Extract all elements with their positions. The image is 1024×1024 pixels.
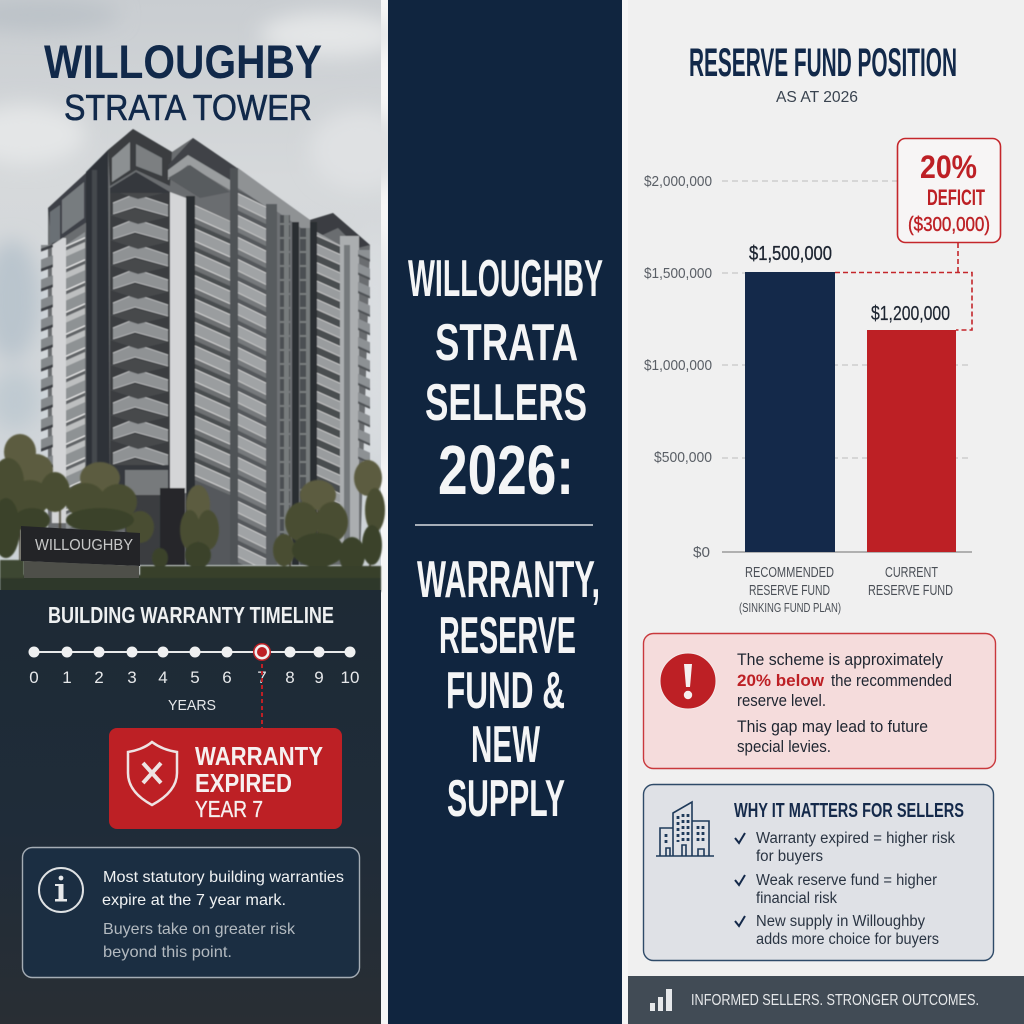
bar chart: reserve fund: $1,500,000 — [749, 243, 832, 265]
info box: warranty note: expire at the 7 year mark. — [102, 892, 286, 909]
alert box: 20% below: the recommended — [831, 671, 952, 690]
timeline chart: YEARS — [168, 697, 216, 714]
callout: warranty expired: WARRANTY — [195, 741, 323, 771]
icon: buildings — [656, 802, 714, 856]
alert box: 20% below: The scheme is approximately — [737, 650, 943, 669]
callout: warranty expired: YEAR 7 — [195, 796, 263, 822]
panel: central title — [388, 0, 622, 1024]
checklist: New supply in Willoughby — [756, 913, 925, 930]
heading: main title: STRATA — [435, 314, 578, 372]
callout: warranty expired — [109, 728, 342, 829]
bar: recommended reserve fund — [745, 272, 835, 552]
alert box: 20% below: reserve level. — [737, 691, 826, 710]
checklist: Warranty expired = higher risk — [756, 830, 955, 847]
checklist: Weak reserve fund = higher — [756, 872, 937, 889]
checklist — [735, 830, 955, 948]
photo: trees and hedge — [0, 434, 385, 592]
heading: subtitle: FUND & — [446, 662, 565, 720]
timeline chart: 8 — [285, 668, 295, 687]
timeline chart — [28, 643, 359, 728]
timeline chart: 7 — [257, 668, 267, 687]
mid wing top — [168, 138, 237, 190]
heading: subtitle: WARRANTY, — [417, 551, 600, 609]
alert box: 20% below: 20% below — [737, 671, 825, 690]
photo: tower — [41, 129, 370, 565]
info box: why it matters for sellers — [644, 784, 994, 960]
icon: exclamation — [660, 653, 716, 709]
checklist: for buyers — [756, 848, 823, 865]
heading: subtitle — [417, 551, 600, 828]
info box: warranty note: Buyers take on greater risk — [103, 921, 296, 938]
timeline chart: 5 — [190, 668, 200, 687]
bar chart: reserve fund: RECOMMENDED — [745, 564, 834, 581]
bar chart: reserve fund: CURRENT — [885, 564, 938, 581]
timeline chart: 2 — [94, 668, 104, 687]
bar chart: reserve fund: $2,000,000 — [644, 173, 712, 190]
timeline chart: 10 — [341, 668, 359, 687]
bar chart: reserve fund: (SINKING FUND PLAN) — [739, 600, 841, 615]
sign: Willoughby — [21, 526, 140, 578]
title: Willoughby Strata Tower: STRATA TOWER — [64, 87, 312, 128]
timeline chart: 6 — [222, 668, 232, 687]
subheading: as at 2026: AS AT 2026 — [776, 89, 858, 106]
bar chart: reserve fund: $1,200,000 — [871, 303, 950, 325]
icon: bar chart — [650, 989, 672, 1011]
photo: sky — [0, 0, 410, 600]
info box: warranty note — [22, 848, 360, 978]
heading: main title — [408, 250, 603, 509]
heading: subtitle: SUPPLY — [447, 770, 565, 828]
timeline chart: 0 — [29, 668, 39, 687]
callout: 20% deficit: ($300,000) — [908, 214, 990, 236]
timeline chart: 1 — [62, 668, 72, 687]
bar chart: reserve fund: $0 — [693, 544, 710, 561]
right wing — [310, 213, 370, 248]
alert box: 20% below — [644, 634, 996, 768]
title: Willoughby Strata Tower — [44, 35, 322, 128]
window strips — [266, 204, 310, 565]
sign: Willoughby: WILLOUGHBY — [35, 537, 133, 554]
heading: building warranty timeline: BUILDING WARRANTY TIMELINE — [48, 602, 334, 628]
callout: 20% deficit — [898, 138, 1000, 242]
heading: subtitle: RESERVE — [439, 607, 576, 665]
left wing — [52, 238, 66, 523]
panel: building and warranty timeline — [0, 0, 410, 1024]
callout: 20% deficit: 20% — [920, 149, 977, 185]
bar: current reserve fund — [867, 330, 956, 552]
timeline chart: 9 — [314, 668, 324, 687]
heading: main title: 2026: — [438, 431, 574, 509]
info box: warranty note: Most statutory building warranties — [103, 869, 344, 886]
icon: info — [39, 868, 83, 912]
info box: warranty note: beyond this point. — [103, 944, 232, 961]
footer strip — [628, 976, 1024, 1024]
alert box: 20% below: special levies. — [737, 737, 831, 756]
heading: main title: WILLOUGHBY — [408, 250, 603, 308]
heading: subtitle: NEW — [471, 716, 541, 774]
centre wing top — [108, 129, 172, 186]
dark lower background — [0, 590, 381, 1024]
bar chart: reserve fund: $500,000 — [654, 449, 712, 466]
checklist: financial risk — [756, 890, 837, 907]
bar chart: reserve fund: $1,500,000 — [644, 265, 712, 282]
icon: shield with cross — [128, 742, 177, 805]
title: Willoughby Strata Tower: WILLOUGHBY — [44, 35, 322, 88]
bar chart: reserve fund: RESERVE FUND — [749, 582, 830, 599]
bar chart: reserve fund: $1,000,000 — [644, 357, 712, 374]
alert box: 20% below: This gap may lead to future — [737, 717, 928, 736]
timeline chart: 3 — [127, 668, 137, 687]
bar chart: reserve fund: RESERVE FUND — [868, 582, 953, 599]
checklist: adds more choice for buyers — [756, 931, 939, 948]
callout: 20% deficit: DEFICIT — [927, 185, 985, 210]
panel: reserve fund position — [628, 0, 1024, 1024]
callout: warranty expired: EXPIRED — [195, 768, 292, 798]
heading: main title: SELLERS — [425, 374, 587, 432]
bar chart: reserve fund — [644, 173, 972, 615]
timeline chart: 4 — [158, 668, 168, 687]
